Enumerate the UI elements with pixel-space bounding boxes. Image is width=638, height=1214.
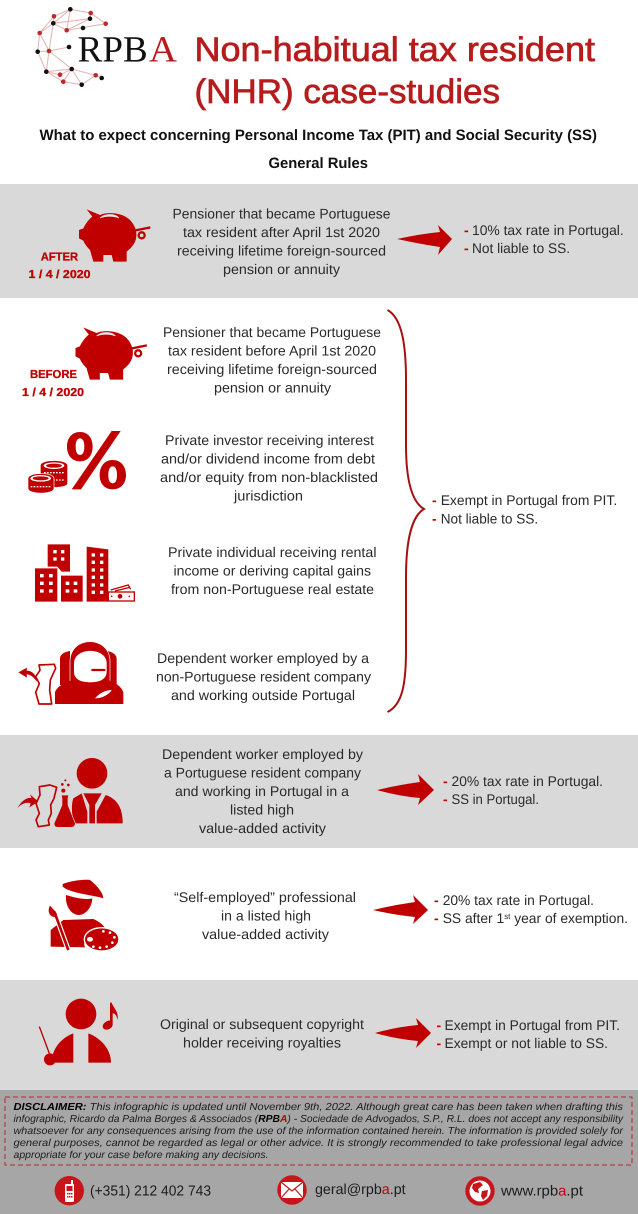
text: dependent worker Portuguese: and working in Portugal in a	[175, 783, 349, 799]
text: dependent worker Portuguese: value-added activity	[199, 820, 326, 836]
text: self-employed: “Self-employed” professional	[174, 889, 356, 905]
result: exempt: -	[432, 510, 437, 526]
text: self-employed	[174, 889, 356, 942]
result: after	[464, 222, 624, 256]
result: exempt: -	[432, 492, 437, 508]
result: exempt or not liable: Exempt in Portugal from PIT.	[444, 1017, 620, 1033]
text: copyright holder: Original or subsequent copyright	[160, 1016, 364, 1032]
text: private investor: and/or dividend income from debt	[161, 450, 375, 466]
result: exempt or not liable: -	[436, 1035, 442, 1051]
logo: RPBA	[35, 7, 177, 87]
footer panel	[0, 1090, 638, 1214]
panel: royalties	[0, 980, 638, 1090]
icon: percent and coins	[28, 431, 126, 493]
text: pensioner before: tax resident before April 1st 2020	[168, 342, 376, 358]
text: dependent worker Portuguese: listed high	[230, 802, 294, 818]
label: after date	[28, 252, 90, 281]
logo: RPBA: A	[149, 30, 177, 70]
text: private individual: Private individual receiving rental	[168, 544, 376, 560]
arrow	[373, 895, 428, 924]
result: after: -	[464, 240, 469, 256]
disclaimer box: whatsoever for any consequences arising from the use of the information contained herein. The information is provided solely for	[14, 1126, 624, 1137]
text: dependent worker non-Portuguese: non-Portuguese resident company	[156, 668, 371, 684]
text: private individual	[168, 544, 376, 597]
result: 20 percent, SS in Portugal	[443, 773, 603, 807]
icon: globe	[465, 1176, 495, 1206]
title: (NHR) case-studies	[194, 73, 500, 111]
text: pensioner after: Pensioner that became Portuguese	[172, 206, 391, 222]
text: dependent worker non-Portuguese: and working outside Portugal	[171, 687, 355, 703]
text: pensioner after	[172, 206, 391, 277]
logo: RPBA: RPB	[78, 30, 148, 70]
result: 20 percent, SS after first year: 20% tax rate in Portugal.	[443, 892, 594, 908]
panel: self-employed	[49, 880, 628, 951]
disclaimer box: DISCLAIMER: This infographic is updated until November 9th, 2022. Although great care has been taken when drafting this	[14, 1102, 623, 1113]
result: exempt or not liable: -	[436, 1017, 442, 1033]
result: 20 percent, SS after first year: -	[434, 892, 439, 908]
result: 20 percent, SS in Portugal: -	[443, 773, 448, 789]
result: after: Not liable to SS.	[472, 240, 570, 256]
icon: piggy bank before	[75, 327, 147, 380]
icon: buildings and cash	[35, 544, 134, 602]
text: private individual: income or deriving capital gains	[174, 562, 371, 578]
text: email: geral@rpba.pt	[315, 1182, 406, 1198]
disclaimer box: general purposes, cannot be regarded as legal or other advice. It is strongly recommended to take professional legal advice	[14, 1138, 623, 1149]
label: after date: AFTER	[41, 252, 79, 264]
result: 20 percent, SS in Portugal: 20% tax rate in Portugal.	[452, 773, 603, 789]
text: dependent worker Portuguese: Dependent worker employed by	[162, 746, 363, 762]
text: pensioner after: tax resident after April 1st 2020	[183, 224, 380, 240]
result: exempt or not liable: Exempt or not liable to SS.	[444, 1035, 608, 1051]
text: private investor: and/or equity from non-blacklisted	[160, 469, 378, 485]
text: dependent worker non-Portuguese: Dependent worker employed by a	[157, 650, 369, 666]
brace	[388, 310, 424, 712]
disclaimer box	[5, 1097, 632, 1165]
disclaimer box: appropriate for your case before making any decisions.	[14, 1150, 268, 1161]
text: dependent worker Portuguese: a Portuguese resident company	[164, 764, 361, 780]
result: exempt or not liable	[436, 1017, 620, 1051]
title: Non-habitual tax resident	[194, 31, 596, 69]
label: before date: 1 / 4 / 2020	[22, 387, 84, 399]
text: private individual: from non-Portuguese real estate	[171, 581, 374, 597]
result: after: -	[464, 222, 469, 238]
text: self-employed: in a listed high	[221, 908, 311, 924]
heading: general rules: General Rules	[268, 155, 368, 172]
arrow	[397, 225, 452, 255]
result: exempt: Exempt in Portugal from PIT.	[441, 492, 617, 508]
result: 20 percent, SS after first year: st	[504, 912, 511, 921]
arrow	[375, 1018, 431, 1048]
result: 20 percent, SS after first year	[434, 892, 628, 926]
icon: remote worker and Portugal map	[18, 642, 123, 704]
disclaimer box: infographic, Ricardo da Palma Borges & Associados ( RPBA) - Sociedade de Advogados, S.P., R.L. does not accept any responsibility	[14, 1114, 624, 1125]
result: after: 10% tax rate in Portugal.	[472, 222, 624, 238]
title	[194, 31, 596, 111]
text: pensioner before: Pensioner that became Portuguese	[163, 324, 381, 340]
result: exempt: Not liable to SS.	[441, 510, 538, 526]
icon: musician	[39, 999, 118, 1065]
result: 20 percent, SS after first year: SS after 1	[443, 910, 505, 926]
icon: mail	[277, 1175, 307, 1205]
text: private investor	[160, 432, 378, 504]
text: pensioner before	[163, 324, 381, 396]
icon: piggy bank after	[79, 209, 150, 262]
text: pensioner after: receiving lifetime foreign-sourced	[177, 242, 386, 258]
text: private investor: jurisdiction	[233, 488, 303, 504]
result: 20 percent, SS after first year: -	[434, 910, 439, 926]
icon: painter	[49, 880, 119, 951]
text: phone number: (+351) 212 402 743	[90, 1184, 211, 1200]
icon: scientist and Portugal map	[17, 758, 123, 827]
label: before date	[22, 369, 84, 399]
icon: phone	[55, 1176, 84, 1205]
result: exempt	[432, 492, 617, 526]
panel: pensioner after 1/4/2020	[0, 184, 638, 298]
text: pensioner before: pension or annuity	[214, 380, 331, 396]
result: 20 percent, SS after first year: year of exemption.	[510, 910, 628, 926]
arrow	[377, 774, 434, 805]
result: 20 percent, SS in Portugal: SS in Portugal.	[452, 791, 539, 807]
text: private investor: Private investor receiving interest	[165, 432, 374, 448]
text: pensioner after: pension or annuity	[223, 261, 340, 277]
label: after date: 1 / 4 / 2020	[28, 269, 90, 281]
subtitle: What to expect concerning Personal Income Tax (PIT) and Social Security (SS)	[40, 127, 597, 144]
text: pensioner before: receiving lifetime foreign-sourced	[167, 361, 377, 377]
result: 20 percent, SS in Portugal: -	[443, 791, 448, 807]
text: copyright holder	[160, 1016, 364, 1050]
panel: exempt group	[18, 310, 617, 712]
text: copyright holder: holder receiving royalties	[183, 1034, 341, 1050]
label: before date: BEFORE	[30, 369, 77, 381]
panel: dependent worker listed activity	[0, 735, 638, 848]
text: self-employed: value-added activity	[202, 926, 329, 942]
text: dependent worker non-Portuguese	[156, 650, 371, 703]
text: dependent worker Portuguese	[162, 746, 363, 836]
text: website: www.rpba.pt	[500, 1184, 583, 1200]
